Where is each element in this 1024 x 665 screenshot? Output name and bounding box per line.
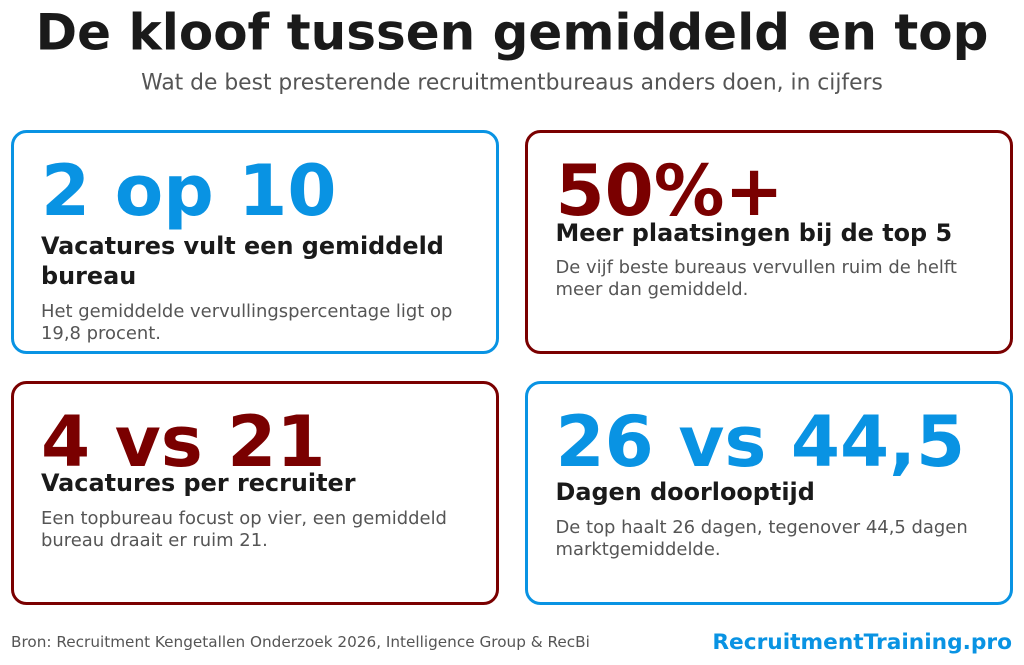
panel: 50%+: De vijf beste bureaus vervullen ruim de helft [556, 257, 957, 278]
panel: 2 op 10: 19,8 procent. [41, 323, 161, 344]
source note: Bron: Recruitment Kengetallen Onderzoek 2026, Intelligence Group & RecBi [11, 633, 590, 651]
panel: 4 vs 21: 4 vs 21 [41, 400, 326, 483]
subtitle: Wat de best presterende recruitmentbureaus anders doen, in cijfers [141, 70, 883, 96]
panel: 2 op 10: 2 op 10 [41, 149, 337, 232]
title: De kloof tussen gemiddeld en top [36, 4, 988, 62]
panel: 2 op 10: bureau [41, 262, 136, 290]
panel: 26 vs 44,5 [526, 382, 1012, 604]
panel: 50%+: meer dan gemiddeld. [556, 279, 748, 300]
panel: 4 vs 21 [12, 382, 498, 604]
panel: 4 vs 21: Vacatures per recruiter [41, 469, 356, 497]
panel: 2 op 10: Vacatures vult een gemiddeld [41, 232, 444, 260]
panel: 50%+: Meer plaatsingen bij de top 5 [556, 219, 952, 247]
panel: 26 vs 44,5: De top haalt 26 dagen, tegenover 44,5 dagen [556, 517, 968, 538]
panel: 50%+ [526, 132, 1012, 352]
panel: 4 vs 21: Een topbureau focust op vier, een gemiddeld [41, 508, 447, 529]
panel: 2 op 10: Het gemiddelde vervullingspercentage ligt op [41, 301, 452, 322]
panel: 50%+: 50%+ [556, 149, 784, 232]
brand: RecruitmentTraining.pro [712, 630, 1012, 655]
panel: 2 op 10 [12, 132, 498, 352]
panel: 4 vs 21: bureau draait er ruim 21. [41, 530, 268, 551]
panel: 26 vs 44,5: Dagen doorlooptijd [556, 478, 815, 506]
panel: 26 vs 44,5: 26 vs 44,5 [556, 400, 965, 483]
panel: 26 vs 44,5: marktgemiddelde. [556, 539, 721, 560]
